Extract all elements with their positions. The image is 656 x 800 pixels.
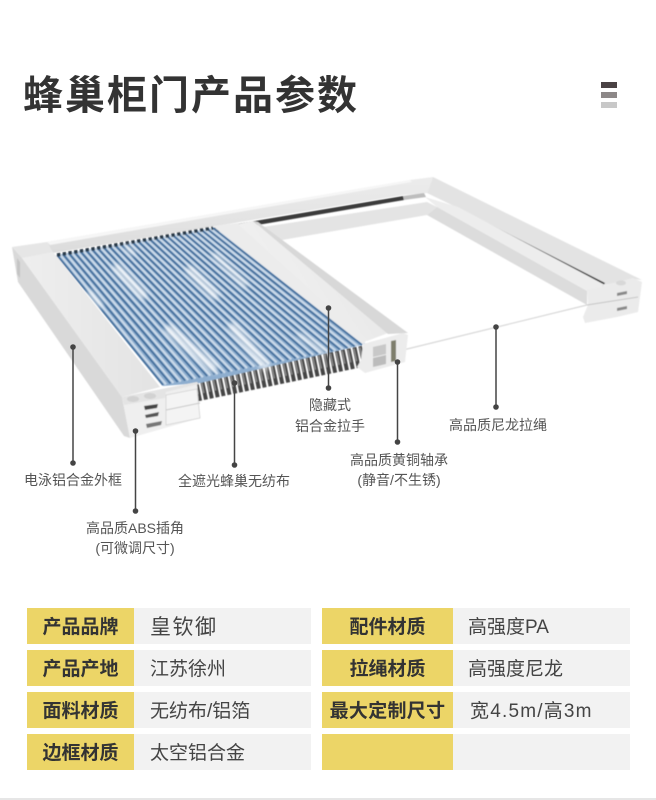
title: 蜂巢柜门产品参数: [23, 74, 359, 118]
product diagram: [12, 177, 642, 556]
row: brand: [27, 608, 311, 644]
callout: hidden handle: [295, 305, 365, 434]
row: max size: 宽4.5m/高3m: [470, 701, 593, 722]
callout: blackout fabric: [178, 380, 290, 489]
callout: ABS corner: (可微调尺寸): [95, 540, 175, 556]
callout: brass bearing: 高品质黄铜轴承: [350, 452, 448, 468]
callout: brass bearing: [350, 359, 448, 488]
row: frame: 边框材质: [42, 743, 118, 764]
callout: brass bearing: (静音/不生锈): [357, 472, 441, 488]
row: fittings: 配件材质: [349, 617, 426, 638]
row: brand: 产品品牌: [42, 617, 118, 638]
left stile: [12, 242, 53, 258]
honeycomb fabric: [57, 228, 362, 386]
bottom rule: [0, 798, 656, 800]
row: fabric: [27, 692, 311, 728]
inner rail: [263, 202, 437, 240]
row: cord: 拉绳材质: [349, 659, 426, 680]
callout: ABS corner: 高品质ABS插角: [86, 520, 184, 536]
callout: anodized frame: 电泳铝合金外框: [24, 472, 122, 488]
top rail: [47, 177, 433, 253]
panel: parameter table left: [27, 608, 311, 770]
row: origin: [27, 650, 311, 686]
window frame: [12, 177, 642, 438]
icon: menu bars: [601, 82, 617, 108]
row: fittings: [322, 608, 630, 644]
row: fabric: 无纺布/铝箔: [150, 701, 250, 722]
handle bar: [213, 223, 367, 344]
callout: hidden handle: 隐藏式: [309, 397, 351, 413]
callout: blackout fabric: 全遮光蜂巢无纺布: [178, 473, 290, 489]
callout: nylon cord: 高品质尼龙拉绳: [449, 417, 547, 433]
row: max size: [322, 692, 630, 728]
right rail: [427, 177, 642, 285]
handle cross section: [357, 333, 408, 373]
pleat folds: [196, 356, 364, 391]
callout: anodized frame: [24, 344, 122, 488]
callout: hidden handle: 铝合金拉手: [295, 418, 365, 434]
row: fabric: 面料材质: [42, 701, 118, 722]
row: brand: 皇钦御: [150, 616, 218, 639]
callout: nylon cord: [449, 324, 547, 433]
right end cap: [583, 278, 642, 323]
row: cord: 高强度尼龙: [468, 659, 563, 680]
row: origin: 产品产地: [42, 659, 118, 680]
row: origin: 江苏徐州: [150, 659, 226, 680]
callout: ABS corner: [86, 428, 184, 556]
nylon cord: [403, 305, 587, 350]
row: empty: [322, 734, 630, 770]
row: fittings: 高强度PA: [468, 617, 549, 638]
corner cap: [122, 382, 200, 438]
row: max size: 最大定制尺寸: [330, 701, 445, 722]
panel: parameter table right: [322, 608, 630, 770]
row: frame: [27, 734, 311, 770]
row: cord: [322, 650, 630, 686]
fabric highlights: [90, 248, 325, 367]
row: frame: 太空铝合金: [150, 743, 245, 764]
